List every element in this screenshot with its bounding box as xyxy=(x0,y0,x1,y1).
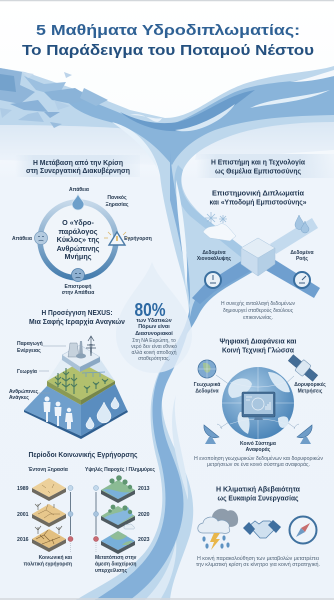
diagram caption: δημιουργεί σταθερούς διαύλους xyxy=(223,307,294,314)
column headings: Υψηλές Παροχές / Πλημμύρες xyxy=(85,467,155,473)
globe xyxy=(222,367,294,439)
heading: digital: Κοινή Τεχνική Γλώσσα xyxy=(222,346,295,354)
globe labels xyxy=(194,382,326,453)
pyramid base: human needs xyxy=(24,384,128,439)
flood tiles xyxy=(101,475,135,554)
pyramid labels: Ανθρώπινες xyxy=(9,389,38,395)
icon: handshake xyxy=(243,520,281,538)
globe labels: Γεωχωρικά xyxy=(194,382,221,388)
cycle centre text xyxy=(57,218,100,261)
drought years: 1989 xyxy=(17,486,29,492)
heading: diplomacy: και «Υποδομή Εμπιστοσύνης» xyxy=(210,198,306,206)
heading: climate: Η Κλιματική Αβεβαιότητα xyxy=(216,484,301,494)
heading: transition: στη Συνεργατική Διακυβέρνηση xyxy=(26,168,130,175)
period captions: υπερχείλισης xyxy=(95,568,127,574)
section header bands xyxy=(15,154,334,178)
globe labels: Αναφοράς xyxy=(246,447,271,453)
column headings xyxy=(28,467,155,473)
cycle centre text: Ανθρώπινης xyxy=(57,244,100,253)
panel: crisis to cooperation xyxy=(12,160,152,296)
pyramid top: energy xyxy=(62,336,100,372)
heading: climate: ως Ευκαιρία Συνεργασίας xyxy=(218,494,299,502)
pipe left lower xyxy=(192,258,256,304)
icon: sad face bottom xyxy=(72,268,84,282)
cycle labels: Πανικός xyxy=(107,195,127,201)
data labels: Χιονοκάλυψης xyxy=(197,256,232,262)
pyramid labels: Παραγωγή xyxy=(17,341,43,347)
data labels: Δεδομένα xyxy=(202,250,227,256)
heading: NEXUS: Η Προσέγγιση NEXUS: xyxy=(42,310,112,317)
cycle labels: Επιστροφή xyxy=(65,284,91,290)
icon: dish right xyxy=(294,424,312,444)
heading: NEXUS: Μια Σαφής Ιεραρχία Αναγκών xyxy=(29,319,125,326)
heading: science: Η Επιστήμη και η Τεχνολογία xyxy=(211,158,306,166)
callout text xyxy=(131,318,177,362)
icon: drop xyxy=(72,194,84,210)
period captions: άμεση διαχείριση xyxy=(95,562,136,568)
panel: 80% callout xyxy=(116,262,192,373)
pipe right lower xyxy=(262,258,320,298)
data labels xyxy=(197,250,315,262)
diagram caption: επικοινωνίας. xyxy=(243,315,273,321)
callout text: νερό δεν είναι εθνικό xyxy=(131,343,177,350)
period captions: Κοινωνική και xyxy=(39,555,73,561)
pipe right upper xyxy=(270,218,318,254)
pyramid labels xyxy=(9,341,66,401)
globe caption: μετρήσεων σε ένα κοινό σύστημα αναφοράς. xyxy=(207,461,310,468)
pyramid xyxy=(24,336,128,439)
drought timeline xyxy=(68,486,73,553)
globe labels: Δορυφορικές xyxy=(294,382,326,388)
icon: sad face left xyxy=(34,232,48,244)
period captions: Μετατόπιση στην xyxy=(95,555,137,561)
cycle centre text: Ο «Υδρο- xyxy=(62,218,94,227)
gauge right xyxy=(294,272,310,288)
callout text: Στη ΝΑ Ευρώπη, το xyxy=(132,337,176,344)
monitor xyxy=(242,392,275,420)
broken ice shards xyxy=(0,68,108,128)
callout text: αλλά κοινή αποδοχή xyxy=(132,349,177,356)
cycle labels xyxy=(12,187,152,296)
pyramid middle: agriculture xyxy=(47,358,115,405)
cycle labels: Απάθεια xyxy=(12,236,33,242)
callout text: των Υδατικών xyxy=(136,318,172,324)
hydro-illogical cycle ring xyxy=(40,202,116,278)
cycle labels: Εγρήγορση xyxy=(124,236,152,242)
globe caption xyxy=(194,455,324,468)
icon: compass xyxy=(290,516,316,544)
diagram caption xyxy=(221,300,296,321)
data exchange diagram xyxy=(192,212,320,304)
cycle centre text: Κύκλος» της xyxy=(57,235,100,244)
heading: digital: Ψηφιακή Διαφάνεια και xyxy=(220,336,296,346)
callout number: 80% xyxy=(134,300,166,320)
callout text: Πόρων είναι xyxy=(138,324,170,330)
panel: climate uncertainty xyxy=(196,484,320,568)
pyramid labels: Γεωργία xyxy=(17,369,38,375)
heading: transition xyxy=(26,160,130,175)
water drops xyxy=(295,215,309,233)
globe labels: Δεδομένα xyxy=(195,388,220,394)
cycle centre text: παράλογος xyxy=(58,227,98,236)
period captions xyxy=(24,555,137,574)
icon: small globe xyxy=(198,360,216,378)
heading: diplomacy xyxy=(210,188,306,206)
heading: transition: Η Μετάβαση από την Κρίση xyxy=(33,160,123,167)
icon: warning xyxy=(104,232,130,245)
callout text: Διασυνοριακοί xyxy=(135,331,173,337)
icon: satellite xyxy=(286,352,320,384)
flood years: 2023 xyxy=(138,537,150,543)
climate caption: Η κοινή παρακολούθηση των μεταβολών μετατρέπει xyxy=(197,555,319,562)
flood years: 2020 xyxy=(138,512,150,518)
drought tiles xyxy=(32,478,66,552)
callout text: σταθερότητας. xyxy=(138,355,170,362)
cycle centre text: Μνήμης xyxy=(65,252,92,261)
drought years xyxy=(17,486,29,543)
panel: digital transparency xyxy=(194,336,326,468)
heading: science: ως Θεμέλια Εμπιστοσύνης xyxy=(215,168,301,176)
panel: NEXUS xyxy=(9,310,128,439)
diagram caption: Η συνεχής ανταλλαγή δεδομένων xyxy=(221,300,296,307)
climate caption: την κλιματική κρίση σε κίνητρο για κοινή στρατηγική. xyxy=(196,561,320,568)
globe labels: Μετρήσεις xyxy=(298,388,323,394)
flood years xyxy=(138,486,150,543)
panel: science and technology xyxy=(192,158,320,321)
period captions: πολιτική εγρήγορση xyxy=(24,562,72,568)
cycle labels: στην Απάθεια xyxy=(62,290,95,296)
pyramid labels: Ενέργειας xyxy=(17,348,41,354)
pale wash under wave xyxy=(0,110,334,165)
panel: periods of social awareness xyxy=(17,450,155,574)
cycle labels: Ξηρασίας xyxy=(106,202,129,208)
globe labels: Κοινό Σύστημα xyxy=(240,441,277,447)
heading: NEXUS xyxy=(29,310,125,326)
callout background drop xyxy=(116,262,192,373)
cycle labels: Απάθεια xyxy=(69,187,90,193)
heading: climate xyxy=(216,484,301,502)
icon: dish left xyxy=(204,424,222,444)
flood years: 2013 xyxy=(138,486,150,492)
heading: digital xyxy=(220,336,296,354)
title: Το Παράδειγμα του Ποταμού Νέστου xyxy=(22,42,314,59)
data labels: Δεδομένα xyxy=(290,250,315,256)
globe caption: Η ενοποίηση γεωχωρικών δεδομένων και δορυφορικών xyxy=(194,455,324,462)
connector lines xyxy=(216,375,295,428)
pyramid labels: Ανάγκες xyxy=(9,395,29,401)
title xyxy=(22,22,314,59)
snow hill xyxy=(203,224,236,241)
column headings: Έντονη Ξηρασία xyxy=(28,467,69,473)
data labels: Ροής xyxy=(296,256,308,262)
drought years: 2001 xyxy=(17,512,29,518)
icon: storm cloud xyxy=(198,509,238,550)
title: 5 Μαθήματα Υδροδιπλωματίας: xyxy=(36,22,300,39)
climate caption xyxy=(196,555,320,568)
drought years: 2016 xyxy=(17,537,29,543)
heading: science xyxy=(211,158,306,176)
gauge left xyxy=(205,272,221,288)
flood timeline xyxy=(94,486,98,553)
heading: periods: Περίοδοι Κοινωνικής Εγρήγορσης xyxy=(28,450,138,459)
snowflakes xyxy=(205,212,227,224)
cube xyxy=(241,238,275,276)
heading: diplomacy: Επιστημονική Διπλωματία xyxy=(212,188,304,198)
